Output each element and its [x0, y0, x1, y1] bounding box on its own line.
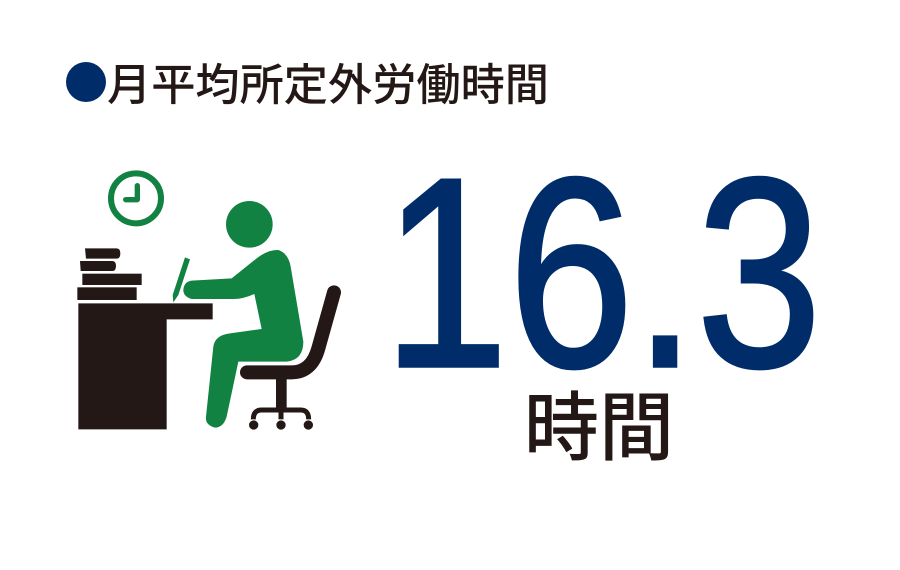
icon: stacked books [77, 248, 142, 300]
heading text: 月平均所定外労働時間 [107, 61, 549, 110]
icon: pen [173, 257, 190, 302]
heading: bullet and title [66, 61, 549, 110]
icon: person [183, 201, 303, 428]
icon: wall clock [111, 173, 161, 223]
icon: desk [78, 303, 213, 429]
unit label: 時間 [524, 386, 674, 470]
icon: chair [247, 292, 334, 430]
icon: office worker at desk [77, 173, 334, 430]
heading bullet [66, 62, 106, 102]
big number: 16.3 [383, 122, 822, 424]
